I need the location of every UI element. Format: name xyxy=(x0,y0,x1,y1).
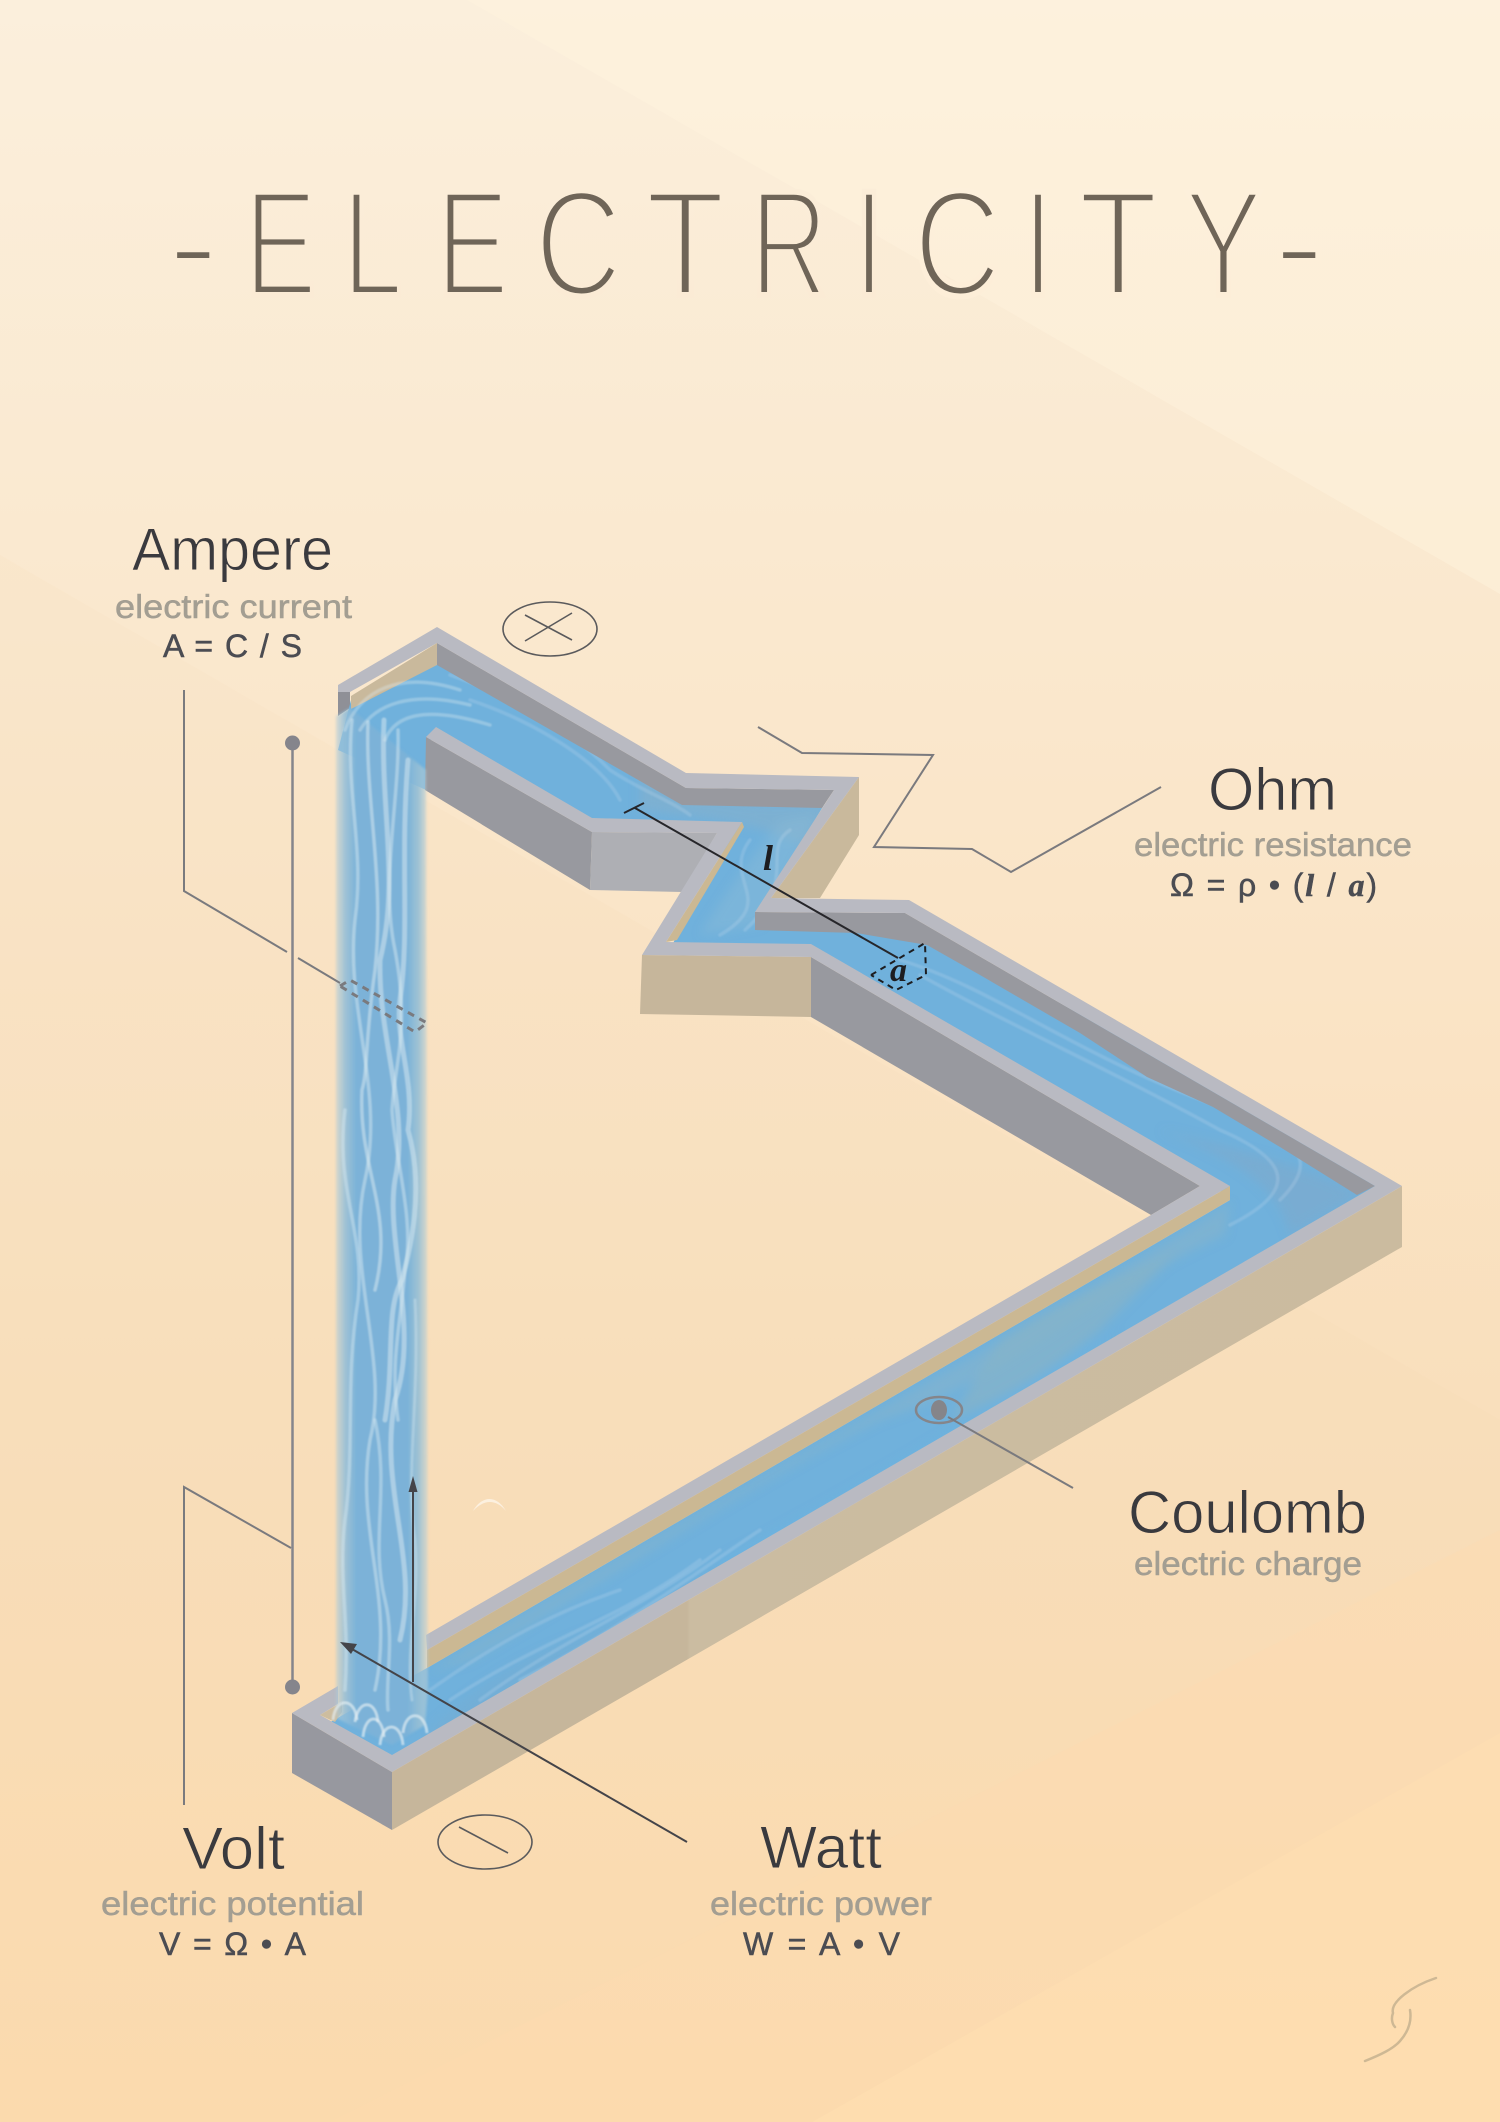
title: T xyxy=(1078,159,1158,327)
label: Watt: W = A • V xyxy=(743,1926,901,1962)
voltage span line with dots xyxy=(286,736,300,1694)
splash arcs in pool xyxy=(333,1703,427,1745)
label: Watt xyxy=(710,1814,932,1962)
inner wall faces xyxy=(425,737,1230,1668)
ohm leader xyxy=(758,727,1161,872)
label: Volt: V = Ω • A xyxy=(159,1926,307,1962)
title: L xyxy=(343,160,403,327)
title: R xyxy=(750,159,827,327)
title: - xyxy=(1273,159,1325,327)
label: Coulomb: Coulomb xyxy=(1128,1479,1367,1546)
title: E xyxy=(437,160,509,327)
vertical flow arrow xyxy=(408,1476,418,1682)
label: Coulomb: electric charge xyxy=(1134,1545,1362,1582)
title: I xyxy=(854,160,884,327)
title: C xyxy=(535,159,622,327)
resistance cross-section xyxy=(871,943,926,990)
outer faces xyxy=(292,685,1402,1830)
title: I xyxy=(1023,160,1053,327)
label: Volt: Volt xyxy=(182,1815,285,1882)
label: Watt: Watt xyxy=(760,1814,882,1881)
outer wall top strip xyxy=(292,627,1402,1772)
waterfall xyxy=(336,682,490,1745)
title: C xyxy=(914,159,1001,327)
volt leader xyxy=(184,1487,291,1805)
label: Ohm: Ohm xyxy=(1208,756,1337,823)
ampere leader and current cross-section xyxy=(184,690,427,1032)
positive terminal symbol xyxy=(503,602,597,656)
label: Ohm xyxy=(1134,756,1412,903)
title: T xyxy=(645,159,725,327)
label: Coulomb xyxy=(1128,1479,1367,1582)
resistance length line: l xyxy=(763,838,773,878)
circuit channel structure xyxy=(292,627,1402,1830)
label: Watt: electric power xyxy=(710,1885,932,1922)
title: E xyxy=(245,160,317,327)
water surface xyxy=(325,650,1385,1762)
resistance length line xyxy=(624,803,898,958)
label: Ampere: Ampere xyxy=(132,516,333,583)
title xyxy=(167,159,1325,327)
far wall faces xyxy=(320,643,1375,1722)
label: Ampere: electric current xyxy=(115,588,352,625)
faint arc on background xyxy=(473,1499,506,1511)
watt arrow xyxy=(340,1642,687,1842)
label: Ohm: electric resistance xyxy=(1134,826,1412,863)
title: Y xyxy=(1184,159,1263,327)
charge marker and leader xyxy=(916,1397,1073,1488)
negative terminal symbol xyxy=(438,1815,532,1869)
label: Ohm: Ω = ρ • (l / a) xyxy=(1170,867,1377,903)
label: Volt xyxy=(101,1815,364,1962)
resistance cross-section: a xyxy=(890,952,907,989)
logo mark xyxy=(1365,1978,1436,2061)
label: Volt: electric potential xyxy=(101,1885,364,1922)
label: Ampere xyxy=(115,516,352,664)
title: - xyxy=(167,159,219,327)
label: Ampere: A = C / S xyxy=(163,628,302,664)
inner wall top strip xyxy=(426,727,1230,1650)
